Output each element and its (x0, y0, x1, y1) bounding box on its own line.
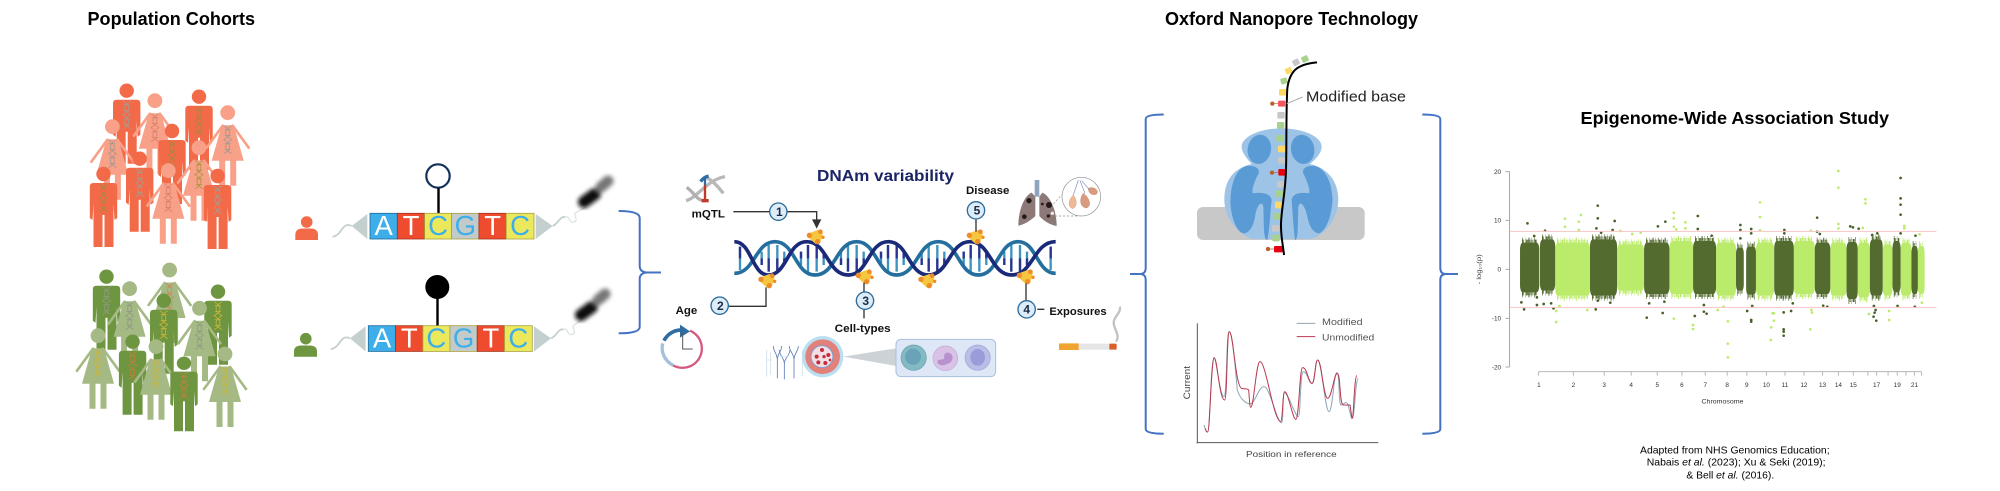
pore protein (1224, 128, 1338, 240)
badge numbers (717, 204, 1030, 317)
x axis: 17 (1873, 382, 1881, 389)
icon: ageing clock (662, 325, 702, 368)
y axis (1492, 169, 1510, 371)
x axis: 3 (1602, 382, 1606, 389)
panel: EWAS (1476, 108, 1936, 481)
number badges (711, 202, 1035, 318)
icon: cigarette (1059, 307, 1120, 350)
modified base label: Modified base (1306, 90, 1406, 106)
DNA strand (1281, 62, 1317, 255)
strand ends and bar: C (508, 322, 528, 353)
strand ends (332, 207, 586, 239)
factor labels (676, 185, 1107, 335)
light chromosome bands (1555, 238, 1925, 300)
strand ends and bar: C (426, 322, 446, 353)
factor labels: Disease (966, 185, 1009, 197)
strand ends and bar: T (401, 322, 418, 353)
x axis: 14 (1835, 382, 1842, 389)
icon: neurons (766, 346, 802, 379)
trace: modified (1204, 332, 1358, 432)
source citation: Adapted from NHS Genomics Education; (1640, 446, 1830, 457)
source citation: & Bell et al. (2016). (1686, 470, 1774, 481)
icon: blood vessel (802, 336, 843, 377)
cohort: green controls group of people (77, 263, 246, 431)
x axis: 10 (1763, 382, 1770, 389)
badge numbers: 1 (776, 205, 783, 219)
connector lines (728, 212, 1044, 318)
heading: DNAm variability: DNAm variability (817, 168, 954, 185)
y axis: 0 (1498, 267, 1502, 274)
x axis (1537, 372, 1922, 389)
y axis: -20 (1492, 364, 1502, 371)
base pair bar: A (375, 210, 394, 241)
x axis: 7 (1703, 382, 1707, 389)
x axis: 4 (1629, 382, 1633, 389)
trace: unmodified (1205, 332, 1357, 432)
base pair bar: G (455, 210, 476, 241)
x axis: 19 (1894, 382, 1901, 389)
x axis: 1 (1537, 382, 1541, 389)
significance lines (1510, 231, 1936, 307)
x axis: 9 (1745, 382, 1749, 389)
DNA bases (1272, 55, 1309, 252)
title: Population Cohorts: Population Cohorts (88, 9, 255, 29)
x axis: 2 (1572, 382, 1576, 389)
base pair bar: T (403, 210, 420, 241)
bracket: cohorts to DNAm (619, 211, 661, 333)
cohort: orange cases group of people (90, 84, 249, 249)
dark outlier points (1521, 178, 1915, 336)
base pair bar: T (484, 210, 501, 241)
zoom wedge (843, 348, 896, 366)
factor labels: Cell-types (835, 323, 891, 335)
icon: green person (294, 333, 317, 357)
base pair bar: C (510, 210, 530, 241)
legend: Modified (1322, 317, 1363, 327)
icon: chromosome (584, 181, 608, 202)
y axis: -10 (1492, 316, 1502, 323)
lollipop: open circle (426, 164, 450, 213)
x axis: 11 (1782, 382, 1789, 389)
dark chromosome bands (1520, 237, 1918, 302)
DNA strand: unmethylated (332, 164, 608, 241)
icon: lungs with inset (1018, 177, 1101, 226)
title: Oxford Nanopore Technology: Oxford Nanopore Technology (1165, 9, 1418, 29)
base pair bar (370, 210, 534, 241)
strand ends and bar: A (373, 322, 392, 353)
y axis label: Current (1182, 365, 1192, 399)
modification marks (1266, 102, 1278, 251)
factor labels: Exposures (1049, 306, 1107, 318)
y axis: 20 (1494, 169, 1502, 176)
icon: chromosome (581, 294, 605, 315)
x axis: 21 (1911, 382, 1918, 389)
badge numbers: 4 (1023, 303, 1030, 317)
bracket: right of nanopore (1422, 114, 1458, 434)
light outlier points (1556, 171, 1922, 357)
x axis label: Position in reference (1246, 449, 1337, 459)
strand ends and bar: G (453, 322, 474, 353)
y axis: 10 (1494, 218, 1502, 225)
x axis: 5 (1655, 382, 1659, 389)
lollipop: filled circle (425, 275, 449, 326)
factor labels: mQTL (692, 208, 725, 220)
strand ends and bar (331, 319, 582, 353)
icon: mQTL DNA (686, 176, 725, 201)
axes (1197, 323, 1378, 443)
source citation (1640, 446, 1830, 481)
legend (1297, 317, 1374, 342)
factor labels: Age (676, 305, 697, 317)
x axis label: Chromosome (1702, 399, 1744, 406)
y axis label: - log₁₀(p) (1476, 254, 1483, 284)
base pair bar: C (428, 210, 448, 241)
panel: DNAm variability (662, 168, 1120, 379)
icon: orange person (295, 216, 318, 240)
membrane (1197, 207, 1365, 240)
x axis: 13 (1819, 382, 1827, 389)
strand ends and bar: T (482, 322, 499, 353)
badge numbers: 5 (974, 204, 981, 218)
legend: Unmodified (1322, 332, 1374, 342)
x axis: 8 (1725, 382, 1729, 389)
DNA strand: methylated (331, 275, 605, 353)
panel: cell types (896, 339, 996, 377)
heading: Epigenome-Wide Association Study: Epigenome-Wide Association Study (1581, 108, 1889, 128)
badge numbers: 3 (862, 294, 869, 308)
arrowhead (812, 219, 821, 229)
badge numbers: 2 (717, 299, 724, 313)
x axis: 12 (1800, 382, 1808, 389)
x axis: 6 (1680, 382, 1684, 389)
methylation marks (758, 229, 1035, 288)
source citation: Nabais et al. (2023); Xu & Seki (2019); (1647, 457, 1826, 468)
panel: nanopore (1182, 55, 1406, 459)
bracket: left of nanopore (1130, 114, 1164, 434)
x axis: 15 (1850, 382, 1857, 389)
Manhattan plot (1476, 169, 1936, 406)
double helix (734, 242, 1056, 275)
current trace chart (1182, 317, 1378, 459)
